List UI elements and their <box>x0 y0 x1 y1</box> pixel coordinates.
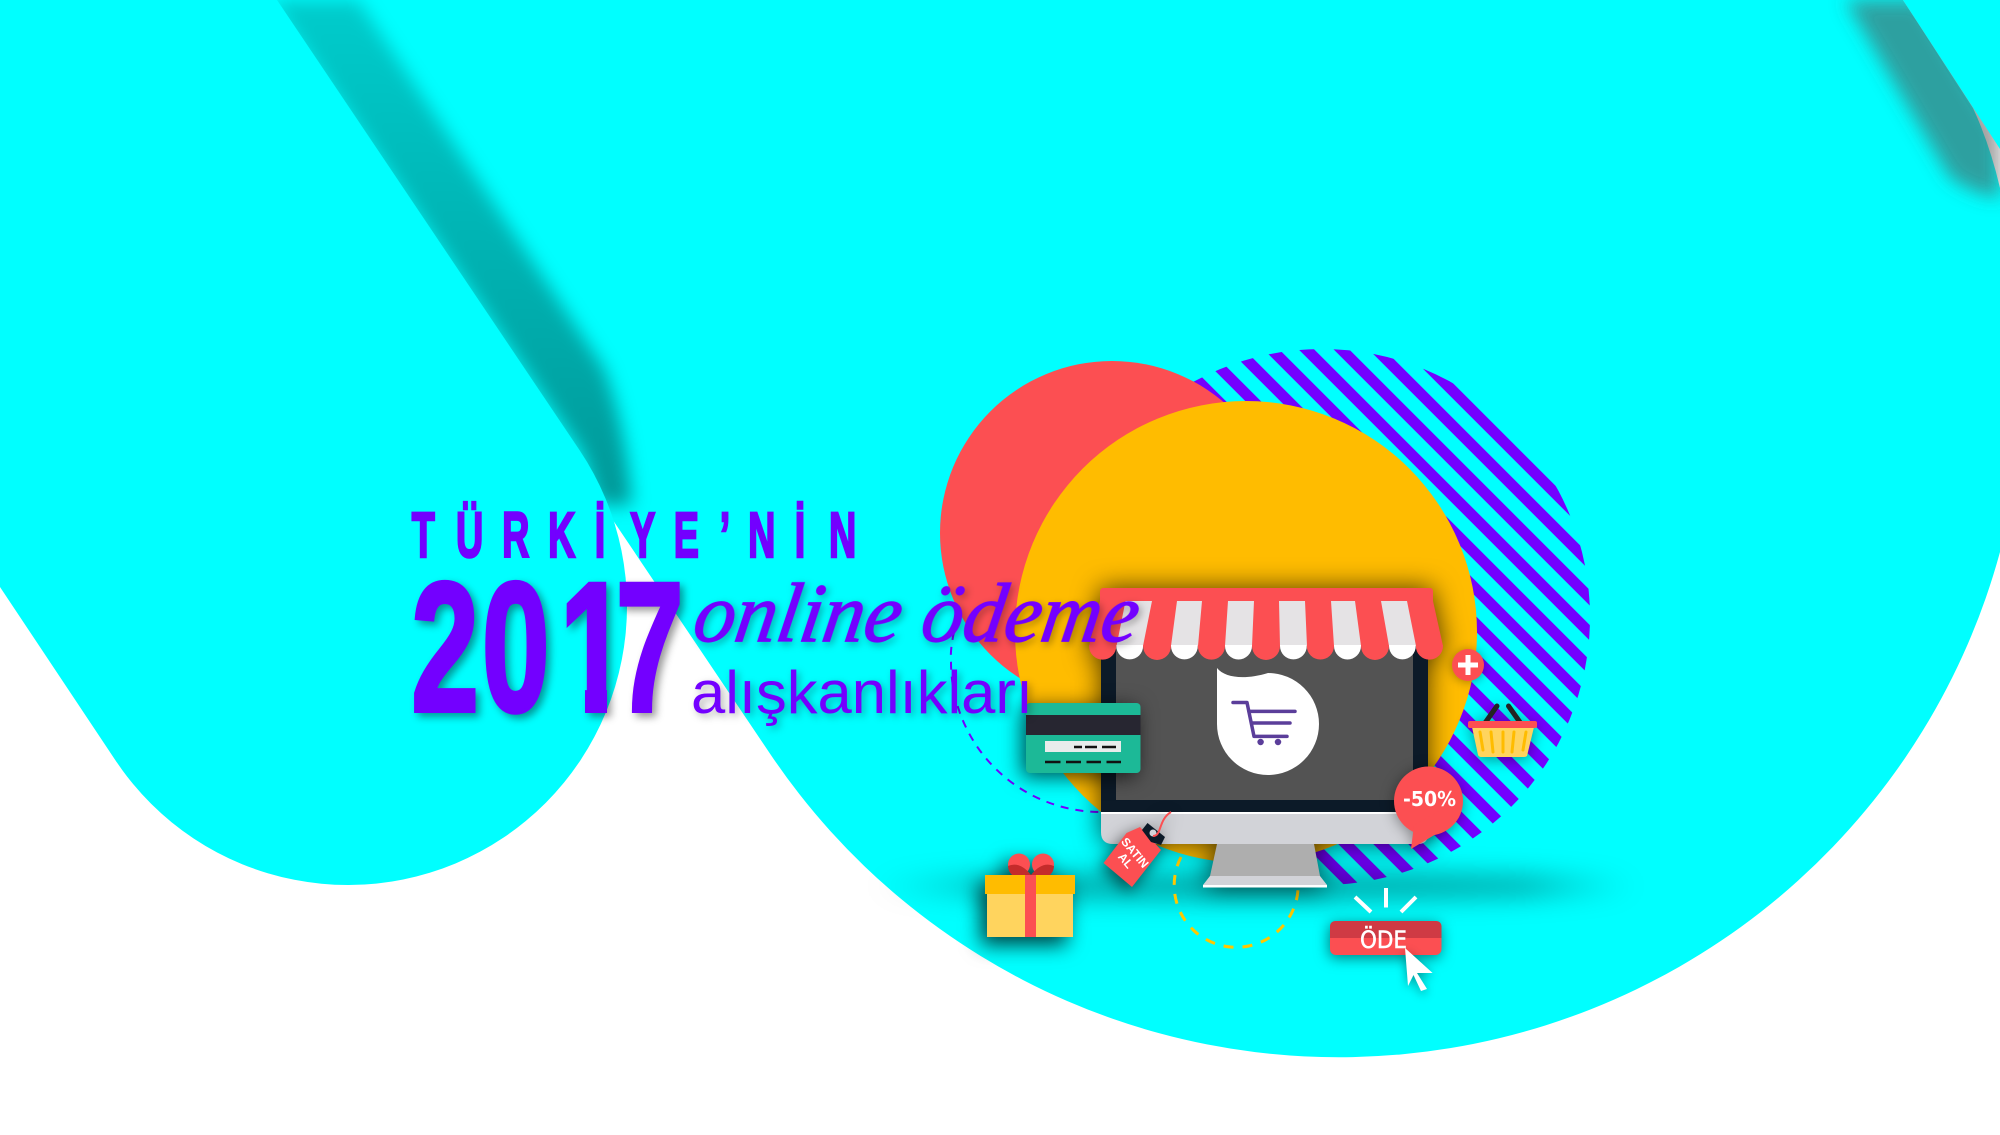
heading: 2017 <box>413 579 689 724</box>
monitor stand <box>1203 844 1327 888</box>
floor shadow <box>870 873 1640 899</box>
click sparks <box>1355 888 1416 912</box>
tag text <box>1109 835 1151 878</box>
tag text: AL <box>1115 850 1136 871</box>
heading: Türkiye'nin: TÜRKİYE’NİN <box>412 500 856 572</box>
monitor base bezel <box>1101 813 1428 844</box>
basket <box>1468 706 1537 757</box>
left cyan pill shape <box>0 0 627 885</box>
awning <box>1089 588 1443 660</box>
monitor <box>1089 588 1443 888</box>
heading: 2017: 1 <box>560 545 628 751</box>
heading: 2017: 7 <box>616 545 684 751</box>
red circle <box>940 361 1284 705</box>
tag text: SATIN <box>1118 835 1151 871</box>
monitor frame <box>1101 605 1428 813</box>
price tag <box>1104 812 1171 887</box>
top right cyan corner shape <box>1903 0 2000 149</box>
icon: shopping cart <box>1233 702 1295 744</box>
shadow of top right shape <box>1845 0 2000 198</box>
monitor screen <box>1116 640 1413 800</box>
button text: ÖDE <box>1360 925 1407 954</box>
discount text: -50% <box>1403 787 1456 811</box>
discount bubble <box>1394 766 1463 849</box>
credit card <box>1026 703 1140 773</box>
title block <box>411 500 1147 751</box>
heading: 2017: 20 <box>411 545 550 751</box>
cursor <box>1405 948 1433 991</box>
plus badge <box>1452 649 1484 681</box>
heading: online ödeme: online ödeme <box>688 567 1147 660</box>
shadow of left cyan shape <box>270 0 632 505</box>
purple dashed arc <box>951 632 1101 812</box>
heading: alışkanlıkları: alışkanlıkları <box>691 659 1033 726</box>
logo: white drop with cart <box>1217 668 1319 775</box>
yellow circle <box>1015 401 1477 863</box>
pay button <box>1330 921 1442 955</box>
gift box <box>985 854 1075 937</box>
striped purple circle <box>1194 349 1590 884</box>
yellow dashed arc <box>1174 857 1298 947</box>
